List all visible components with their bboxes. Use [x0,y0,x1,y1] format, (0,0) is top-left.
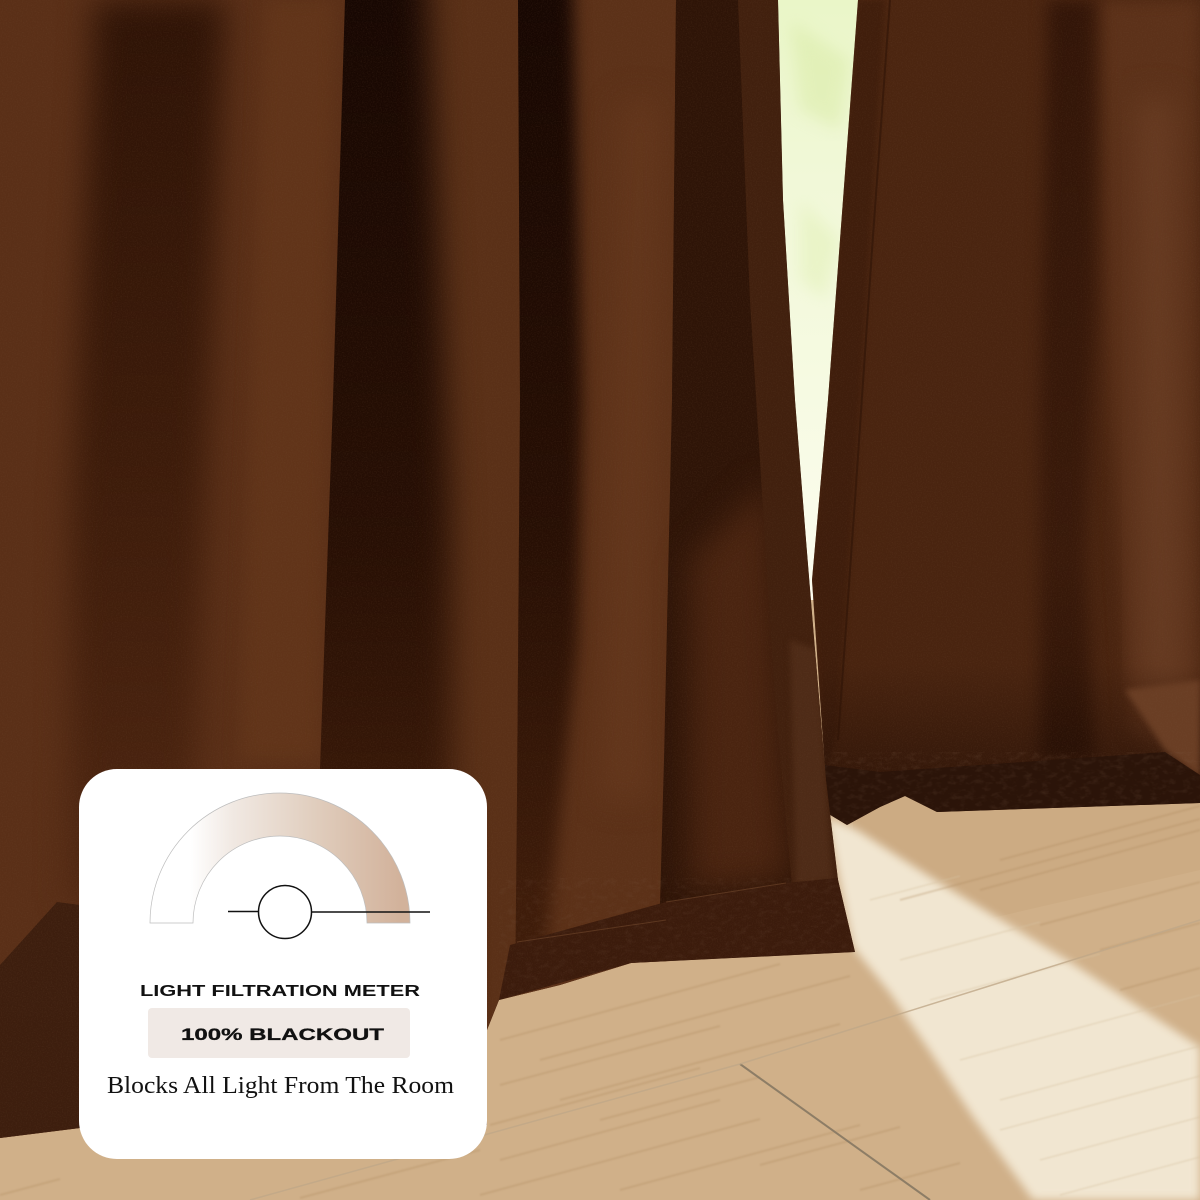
sunlight patch on floor [827,817,1200,1200]
lit corner of right curtain [1125,680,1200,778]
right curtain panel [800,0,1200,830]
lower hem left [0,902,80,1138]
wood grain and plank seams [0,806,1200,1200]
hem side strip [778,4,838,878]
fold: right dark [660,0,792,905]
wooden floor [0,780,1200,1200]
fold: centre dark [320,0,520,1125]
bottom hem [499,878,855,1000]
window light gap [770,0,870,600]
fold: right highlight [690,480,790,890]
fold: far left [0,0,350,1140]
gauge arc [150,793,410,923]
hem stitch [517,883,786,942]
rating pill [148,1008,410,1058]
gauge needle [228,886,430,938]
seam stitch [838,0,890,740]
card background [79,769,487,1159]
hem of right curtain [825,752,1200,825]
left main curtain panel [0,0,860,1200]
fold: centre light [516,0,676,996]
meter heading: LIGHT FILTRATION METER [140,983,420,1000]
description: Blocks All Light From The Room [107,1073,454,1099]
meter card [79,769,487,1159]
rating label: 100% BLACKOUT [181,1025,385,1044]
